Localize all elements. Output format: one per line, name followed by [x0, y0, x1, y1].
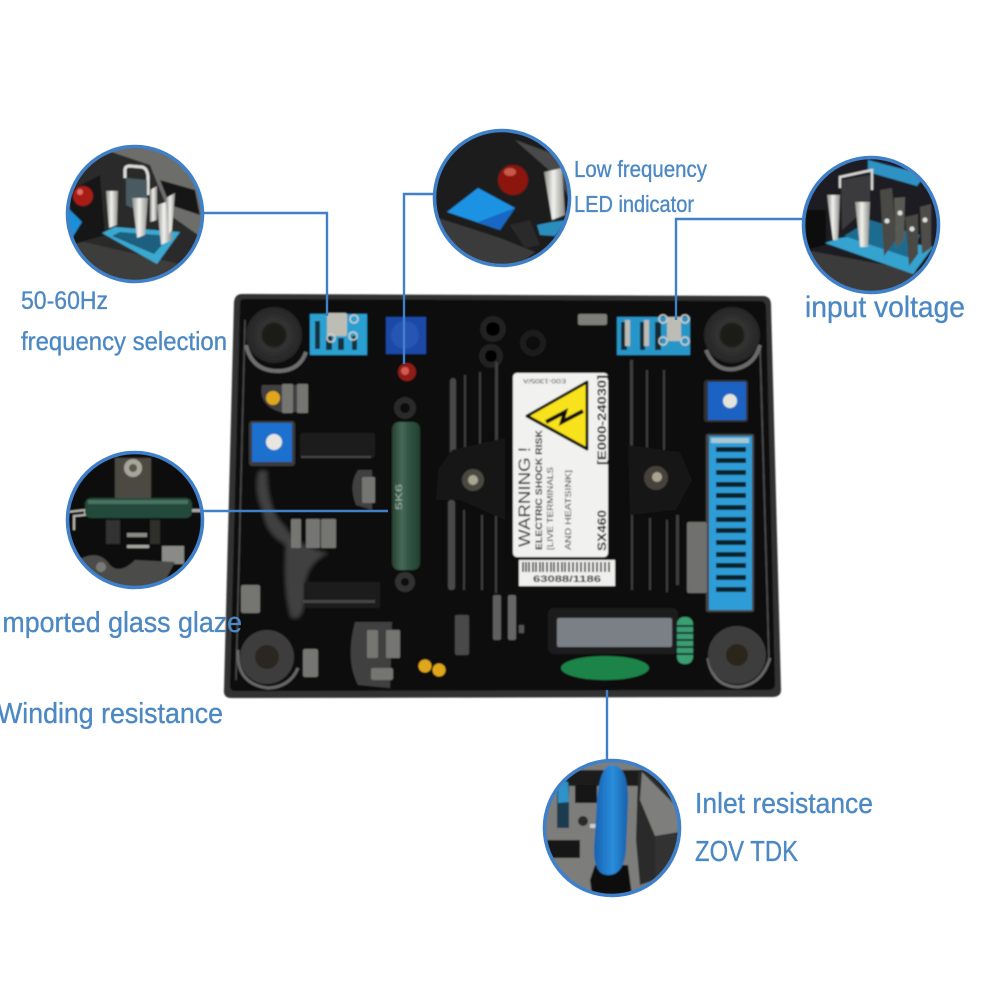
small green inductor [677, 617, 693, 664]
label small code: E00-1305/A [523, 377, 566, 383]
terminals text: [LIVE TERMINALS [545, 467, 555, 550]
warning label [513, 373, 609, 557]
label: inlet resistance ZOV TDK [695, 788, 873, 868]
glass glaze resistor: 5K6 [394, 484, 404, 510]
label: imported glass glaze winding resistance: Winding resistance [0, 698, 223, 730]
board moulding highlights [256, 385, 392, 688]
grey chip components [241, 384, 524, 680]
label: low frequency LED indicator [574, 156, 707, 217]
glass glaze resistor [392, 422, 420, 570]
blue connector: input voltage [617, 315, 690, 355]
label: frequency selection [21, 287, 227, 356]
inset circle: inlet resistance varistor [543, 760, 683, 900]
inset ring [68, 146, 202, 282]
inset ring [434, 130, 570, 266]
warning text: WARNING ! [515, 447, 534, 547]
label: frequency selection: frequency selection [21, 326, 227, 356]
shock risk text: ELECTRIC SHOCK RISK [534, 430, 545, 550]
mounting hole: bottom right [708, 626, 770, 687]
leader line: inlet resistance [606, 690, 608, 765]
blue trimmer: left [249, 421, 295, 466]
label: low frequency LED indicator: LED indicator [574, 191, 694, 217]
label: low frequency LED indicator: Low frequency [574, 156, 707, 182]
heatsink text: AND HEATSINK] [563, 470, 573, 550]
mounting hole: top right [704, 307, 760, 369]
leader line: frequency selection [203, 213, 327, 316]
label: imported glass glaze winding resistance: Imported glass glaze [0, 607, 242, 639]
grey film capacitor [687, 522, 707, 593]
black terminals near label [394, 314, 607, 592]
label: input voltage: input voltage [805, 291, 965, 324]
leader line: glass glaze resistor [203, 510, 388, 512]
inset circle: glass glaze resistor [66, 451, 206, 591]
model text: SX460 [595, 510, 609, 551]
inset circle: input voltage terminals [802, 156, 942, 296]
label: imported glass glaze winding resistance [0, 607, 242, 730]
long blue terminal strip [706, 434, 754, 612]
barcode label [519, 560, 615, 586]
circuit board [224, 294, 781, 698]
warning triangle [527, 382, 587, 449]
mounting screw: left [462, 469, 484, 491]
inset circle: frequency selection switch [66, 146, 206, 290]
label: frequency selection: 50-60Hz [21, 287, 108, 315]
label: inlet resistance ZOV TDK: Inlet resistance [695, 788, 873, 820]
mounting hole: top left [246, 307, 306, 371]
blue connector: frequency selection [310, 313, 367, 355]
mounting hole: bottom left [238, 630, 298, 688]
green disc varistor [561, 656, 649, 680]
blue trimmer with indicator LED [386, 317, 426, 381]
barcode label: 63088/1186 [533, 574, 601, 585]
blue trimmer: right [704, 380, 748, 422]
leader line: LED indicator [404, 194, 434, 364]
inset ring [804, 158, 938, 292]
mounting screw: right [644, 466, 668, 490]
inset ring [544, 760, 680, 896]
part number: [E000-24030] [595, 375, 609, 465]
grey capacitor block [548, 608, 678, 654]
label: inlet resistance ZOV TDK: ZOV TDK [695, 836, 799, 868]
inset ring [68, 452, 202, 588]
inset circle: low frequency LED [433, 129, 573, 269]
leader line: input voltage [676, 219, 803, 320]
heat sink [436, 358, 692, 596]
board body [224, 294, 781, 698]
yellow diodes [266, 391, 446, 676]
